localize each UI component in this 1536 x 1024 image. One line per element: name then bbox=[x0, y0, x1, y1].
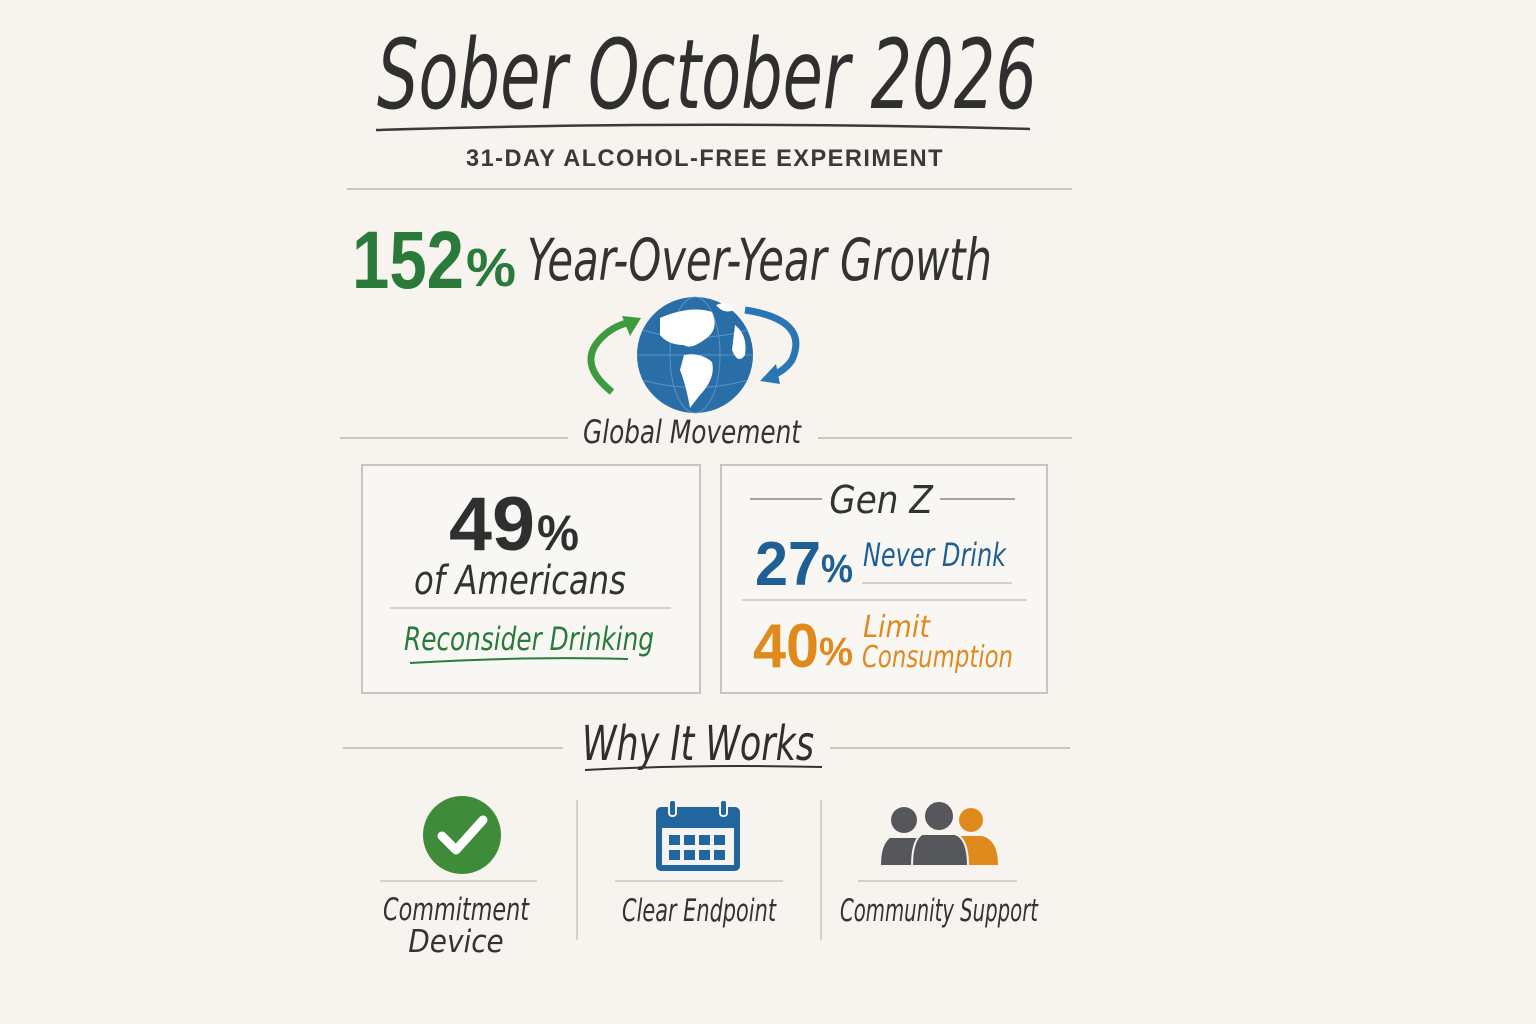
panel: Gen Z: 27 bbox=[755, 530, 821, 599]
panel: Gen Z: Never Drink bbox=[863, 536, 1007, 574]
panel: 49% Americans: % bbox=[537, 505, 579, 561]
item: Commitment Device: Device bbox=[408, 924, 504, 960]
panel: Gen Z: Gen Z bbox=[829, 478, 934, 522]
icon: globe with arrows bbox=[591, 297, 796, 413]
growth headline: % bbox=[466, 238, 516, 298]
title: Sober October 2026 bbox=[377, 19, 1037, 131]
growth headline: Year-Over-Year Growth bbox=[527, 226, 992, 294]
item: Community Support: Community Support bbox=[840, 893, 1039, 929]
section heading: Why It Works: Why It Works bbox=[582, 716, 814, 772]
panel: 49% Americans: Reconsider Drinking bbox=[404, 620, 654, 658]
panel: Gen Z: % bbox=[821, 547, 853, 591]
item: Commitment Device: Commitment bbox=[383, 892, 530, 928]
panel: Gen Z: % bbox=[819, 630, 853, 674]
section heading: Global Movement: Global Movement bbox=[583, 413, 802, 451]
subtitle: 31-DAY ALCOHOL-FREE EXPERIMENT bbox=[466, 145, 944, 172]
panel: 49% Americans: 49 bbox=[449, 482, 535, 567]
item: Community Support bbox=[840, 801, 1039, 929]
item: Commitment Device bbox=[380, 796, 537, 960]
item: Clear Endpoint bbox=[615, 800, 783, 929]
panel: Gen Z: 40 bbox=[753, 612, 819, 681]
item: Clear Endpoint: Clear Endpoint bbox=[622, 893, 777, 929]
growth headline: 152 bbox=[352, 215, 464, 306]
panel: 49% Americans: of Americans bbox=[414, 558, 626, 604]
growth headline bbox=[352, 215, 992, 306]
section heading: Why It Works bbox=[343, 716, 1070, 772]
panel: Gen Z bbox=[721, 465, 1047, 693]
panel: Gen Z: Limit bbox=[863, 610, 931, 645]
panel: 49% Americans bbox=[362, 465, 700, 693]
panel: Gen Z: Consumption bbox=[862, 640, 1013, 675]
